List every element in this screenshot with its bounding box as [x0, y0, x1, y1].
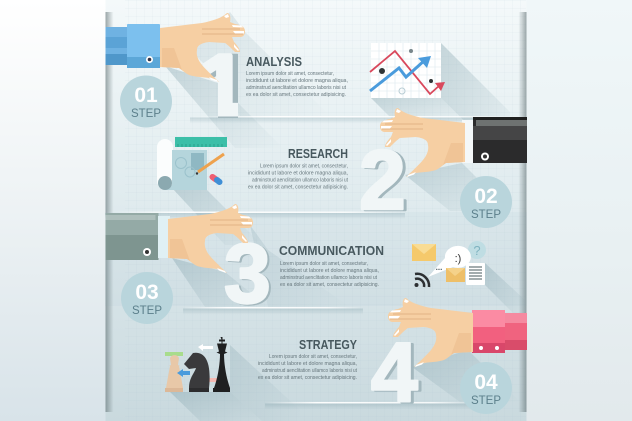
hand with pink sleeve: [388, 298, 527, 367]
heading communication: COMMUNICATION: [279, 243, 384, 258]
heading strategy: STRATEGY: [299, 337, 357, 352]
text block strategy: incididunt ut labore et dolore magna aliqua,: [258, 361, 357, 367]
icon: communication cluster: [412, 241, 486, 287]
number 2: 2: [359, 133, 406, 227]
number 3: 3: [224, 226, 271, 320]
text block communication: adminstrud aenclitation ullamco laboris nisi ut: [280, 275, 378, 281]
hand with grey sleeve: [106, 204, 253, 273]
text block research: incididunt ut labore et dolore magna aliqua,: [248, 170, 348, 176]
number 1: 1: [199, 38, 246, 132]
text block strategy: [258, 354, 357, 381]
text block strategy: Lorem ipsum dolor sit amet, consectetur,: [269, 354, 357, 360]
icon: line chart: [370, 43, 445, 98]
main panel: [105, 0, 527, 421]
icon: communication cluster: :): [455, 253, 461, 265]
step badge 02: [460, 176, 512, 228]
text block strategy: ex ea dolor sit amet, consectetur adipisicing.: [258, 375, 357, 381]
icon: communication cluster: ?: [473, 243, 481, 258]
step badge 03: 03: [135, 281, 159, 304]
text block analysis: [246, 71, 348, 98]
step 01: [106, 13, 445, 133]
text block analysis: Lorem ipsum dolor sit amet, consectetur,: [246, 71, 334, 77]
text block research: ex ea dolor sit amet, consectetur adipisicing.: [248, 184, 348, 190]
step badge 04: [460, 362, 512, 414]
icon: communication cluster: ...: [436, 263, 442, 272]
step badge 03: STEP: [132, 305, 162, 317]
step badge 01: STEP: [131, 108, 161, 120]
heading analysis: ANALYSIS: [246, 54, 302, 69]
text block communication: ex ea dolor sit amet, consectetur adipisicing.: [280, 282, 379, 288]
text block analysis: ex ea dolor sit amet, consectetur adipisicing.: [246, 92, 346, 98]
number 1: [203, 53, 238, 118]
icon: blueprint with ruler and pencil: [157, 137, 227, 190]
number 1: 1: [206, 39, 253, 133]
step badge 04: STEP: [471, 395, 501, 407]
icon: chess pieces: [165, 337, 230, 392]
text block analysis: adminstrud aenclitation ullamco laboris nisi ut: [246, 85, 347, 91]
step badge 03: [121, 272, 173, 324]
background left margin: [0, 0, 106, 421]
hand with blue sleeve: [106, 13, 245, 82]
number 2: 2: [362, 134, 409, 228]
text block communication: incididunt ut labore et dolore magna aliqua,: [280, 268, 379, 274]
step 03: [106, 204, 486, 324]
step badge 02: 02: [474, 185, 498, 208]
text block research: [248, 164, 349, 190]
text block research: adminstrud aenclitation ullamco laboris nisi ut: [252, 178, 349, 184]
step badge 04: 04: [474, 371, 498, 394]
step 02: [157, 108, 527, 228]
text block analysis: incididunt ut labore et dolore magna aliqua,: [246, 78, 348, 84]
text block research: Lorem ipsum dolor sit amet, consectetur,: [260, 164, 348, 170]
heading research: RESEARCH: [288, 146, 348, 161]
step badge 02: STEP: [471, 209, 501, 221]
step badge 01: 01: [134, 84, 158, 107]
number 4: 4: [371, 326, 418, 420]
step 04: [165, 298, 527, 420]
text block communication: Lorem ipsum dolor sit amet, consectetur,: [280, 261, 368, 267]
number 3: 3: [226, 228, 273, 322]
text block communication: [280, 261, 379, 288]
hand with black sleeve: [380, 108, 527, 177]
number 4: 4: [374, 326, 421, 420]
shelf ledges: [105, 116, 527, 410]
long shadows: [165, 12, 525, 421]
background right margin: [526, 0, 632, 421]
text block strategy: adminstrud aenclitation ullamco laboris nisi ut: [262, 368, 357, 374]
step badge 01: [120, 76, 172, 128]
